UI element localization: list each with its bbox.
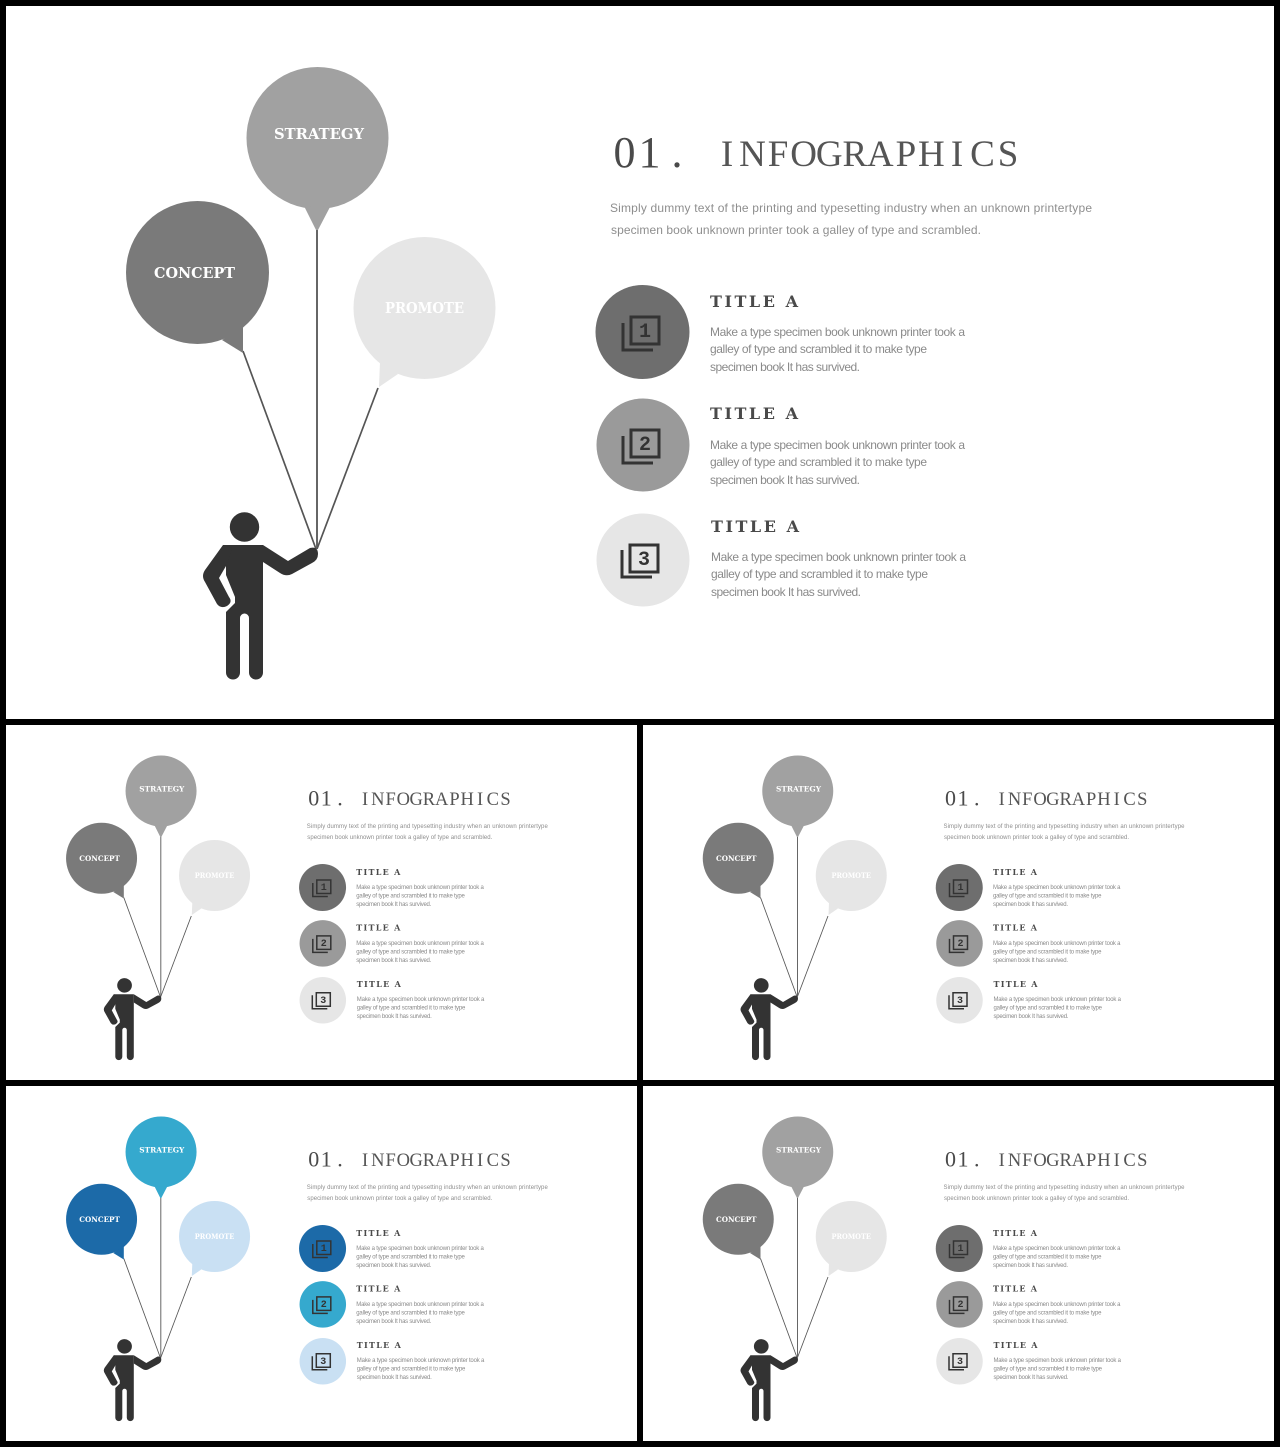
item 3: TITLE A [357,979,402,989]
balloon: promote [816,840,887,915]
strings [124,836,191,996]
intro text: specimen book unknown printer took a galley of type and scrambled. [944,835,1129,841]
item 3: galley of type and scrambled it to make type [357,1366,466,1372]
item 3: Make a type specimen book unknown printer took a [357,1358,485,1364]
heading: 01. [614,128,682,177]
item 1: TITLE A [993,867,1038,877]
balloon: promote: PROMOTE [195,871,235,880]
item 2 [596,398,965,492]
balloon: promote: PROMOTE [832,1232,871,1241]
item 1: Make a type specimen book unknown printer took a [710,325,965,339]
item 2: 2 [639,434,651,457]
intro text: Simply dummy text of the printing and typesetting industry when an unknown printertype [307,1185,548,1191]
item 2: Make a type specimen book unknown printer took a [710,438,965,452]
item 2: galley of type and scrambled it to make type [710,455,927,469]
item 1 [299,864,484,911]
balloon: concept [126,201,269,353]
balloon: strategy [762,756,833,837]
intro text: Simply dummy text of the printing and typesetting industry when an unknown printertype [944,1185,1185,1191]
balloon: strategy [246,67,388,230]
balloon: concept [66,823,137,898]
item 1: galley of type and scrambled it to make type [710,342,927,356]
item 3: TITLE A [994,1340,1038,1350]
item 2: 2 [321,939,327,950]
item 2: Make a type specimen book unknown printer took a [993,941,1121,947]
item 3 [300,1338,485,1384]
item 3: TITLE A [357,1340,402,1350]
balloon: concept [703,823,774,898]
item 3: Make a type specimen book unknown printer took a [994,997,1122,1003]
item 3: specimen book It has survived. [357,1375,432,1381]
item 1: galley of type and scrambled it to make type [356,1254,465,1260]
heading [308,786,511,810]
item 3: specimen book It has survived. [357,1014,432,1020]
balloon: concept: CONCEPT [79,1215,120,1224]
heading: INFOGRAPHICS [999,790,1147,810]
item 3: TITLE A [994,979,1038,989]
item 1: specimen book It has survived. [356,1263,432,1269]
item 3: 3 [320,1357,326,1368]
item 2: galley of type and scrambled it to make type [993,1310,1102,1316]
item 1: 1 [321,1244,327,1255]
item 1: galley of type and scrambled it to make type [993,1254,1102,1260]
balloon: strategy: STRATEGY [776,1146,822,1154]
intro text: specimen book unknown printer took a galley of type and scrambled. [611,223,981,237]
item 2: specimen book It has survived. [356,1319,432,1325]
item 3 [936,1338,1122,1384]
balloon: promote [816,1201,887,1276]
balloon: concept: CONCEPT [154,264,236,282]
panel: grey slide bottom right [703,1116,1185,1421]
item 1 [936,864,1121,911]
item 2: Make a type specimen book unknown printer took a [356,941,484,947]
item 3: galley of type and scrambled it to make type [994,1366,1103,1372]
item 3: 3 [320,996,326,1007]
item 2: galley of type and scrambled it to make type [993,949,1102,955]
heading [308,1146,511,1172]
item 2: 2 [321,1300,327,1311]
heading: 01. [945,1146,980,1172]
strings [243,228,378,549]
balloon: strategy: STRATEGY [139,784,185,794]
item 1: TITLE A [710,292,799,311]
item 3: 3 [957,996,963,1007]
item 1: galley of type and scrambled it to make type [356,894,465,900]
heading: INFOGRAPHICS [362,790,511,810]
heading [945,786,1147,810]
item 2 [936,1281,1121,1328]
balloon: promote [179,840,250,915]
item 3: 3 [957,1357,963,1368]
item 1: specimen book It has survived. [356,902,432,908]
item 1: Make a type specimen book unknown printer took a [356,1246,484,1252]
item 1: 1 [957,883,964,894]
item 1: TITLE A [356,867,401,877]
item 2: galley of type and scrambled it to make type [356,949,465,955]
balloon: promote: PROMOTE [832,871,871,880]
item 2: TITLE A [993,922,1038,932]
item 1: specimen book It has survived. [993,902,1068,908]
intro text: specimen book unknown printer took a galley of type and scrambled. [944,1196,1129,1202]
item 2 [936,920,1121,967]
item 3: TITLE A [711,517,800,536]
item 1: specimen book It has survived. [993,1263,1068,1269]
balloon: promote: PROMOTE [195,1232,235,1241]
item 3: galley of type and scrambled it to make type [994,1005,1103,1011]
heading: INFOGRAPHICS [999,1151,1147,1171]
heading [614,128,1018,177]
heading: INFOGRAPHICS [721,134,1018,175]
item 1: Make a type specimen book unknown printer took a [993,1246,1121,1252]
icon: person [104,1339,161,1421]
item 1: specimen book It has survived. [710,360,860,374]
item 2 [300,1281,484,1328]
item 2 [300,920,484,967]
balloon: strategy [126,1116,197,1198]
item 3: 3 [638,549,650,572]
balloon: strategy [762,1116,833,1198]
item 1: Make a type specimen book unknown printer took a [993,885,1121,891]
item 2: Make a type specimen book unknown printer took a [356,1302,484,1308]
panel: main slide [126,67,1092,680]
item 2: galley of type and scrambled it to make type [356,1310,465,1316]
item 2: TITLE A [356,922,401,932]
intro text [944,1185,1185,1202]
balloon: concept: CONCEPT [716,854,757,863]
intro text: specimen book unknown printer took a galley of type and scrambled. [307,1196,493,1202]
item 1: 1 [639,321,651,344]
item 3 [936,977,1122,1024]
icon: person [104,978,161,1060]
balloon: strategy: STRATEGY [274,125,364,143]
item 1 [299,1225,484,1272]
balloon: strategy: STRATEGY [776,784,822,794]
item 2: TITLE A [356,1283,401,1293]
balloon: concept [703,1184,774,1260]
item 3: galley of type and scrambled it to make type [711,567,928,581]
balloon: concept [66,1184,137,1260]
intro text [944,824,1185,841]
heading [945,1146,1147,1172]
balloon: strategy: STRATEGY [139,1146,185,1154]
item 3: specimen book It has survived. [994,1014,1069,1020]
strings [760,836,828,996]
item 3: Make a type specimen book unknown printer took a [357,997,485,1003]
item 1: TITLE A [356,1228,401,1238]
item 2: TITLE A [710,404,799,423]
item 2: specimen book It has survived. [993,958,1068,964]
intro text: Simply dummy text of the printing and typesetting industry when an unknown printertype [944,824,1185,830]
panel: grey slide top right [703,756,1185,1060]
item 2: 2 [957,939,964,950]
panel: grey slide top left [66,756,548,1060]
heading: 01. [945,786,980,810]
item 1: galley of type and scrambled it to make type [993,894,1102,900]
item 1 [596,285,965,379]
balloon: concept: CONCEPT [716,1215,757,1224]
heading: INFOGRAPHICS [362,1151,511,1171]
intro text: specimen book unknown printer took a galley of type and scrambled. [307,835,493,841]
balloon: promote: PROMOTE [385,299,464,317]
icon: person [203,512,318,680]
item 1: TITLE A [993,1228,1038,1238]
intro text [610,201,1092,237]
item 3: Make a type specimen book unknown printer took a [994,1358,1122,1364]
item 1 [936,1225,1121,1272]
item 3 [596,514,966,606]
item 2: TITLE A [993,1283,1038,1293]
item 2: Make a type specimen book unknown printer took a [993,1302,1121,1308]
item 3: Make a type specimen book unknown printer took a [711,550,966,564]
item 1: 1 [957,1244,964,1255]
intro text [307,824,548,841]
item 3 [300,977,485,1024]
item 2: 2 [957,1300,964,1311]
item 3: galley of type and scrambled it to make type [357,1005,466,1011]
balloon: promote [179,1201,250,1276]
item 1: 1 [321,883,327,894]
strings [760,1197,828,1358]
intro text: Simply dummy text of the printing and typesetting industry when an unknown printertype [307,824,548,830]
heading: 01. [308,786,343,810]
item 3: specimen book It has survived. [711,585,861,599]
item 1: Make a type specimen book unknown printer took a [356,885,484,891]
balloon: concept: CONCEPT [79,854,120,863]
item 2: specimen book It has survived. [710,473,860,487]
intro text: Simply dummy text of the printing and typesetting industry when an unknown printertype [610,201,1092,215]
item 2: specimen book It has survived. [356,958,432,964]
intro text [307,1185,548,1202]
item 2: specimen book It has survived. [993,1319,1068,1325]
item 3: specimen book It has survived. [994,1375,1069,1381]
icon: person [740,1339,798,1421]
balloon: promote [354,237,496,387]
icon: person [740,978,798,1060]
heading: 01. [308,1146,343,1172]
panel: blue slide bottom left [66,1116,548,1421]
balloon: strategy [126,756,197,837]
strings [124,1197,191,1358]
